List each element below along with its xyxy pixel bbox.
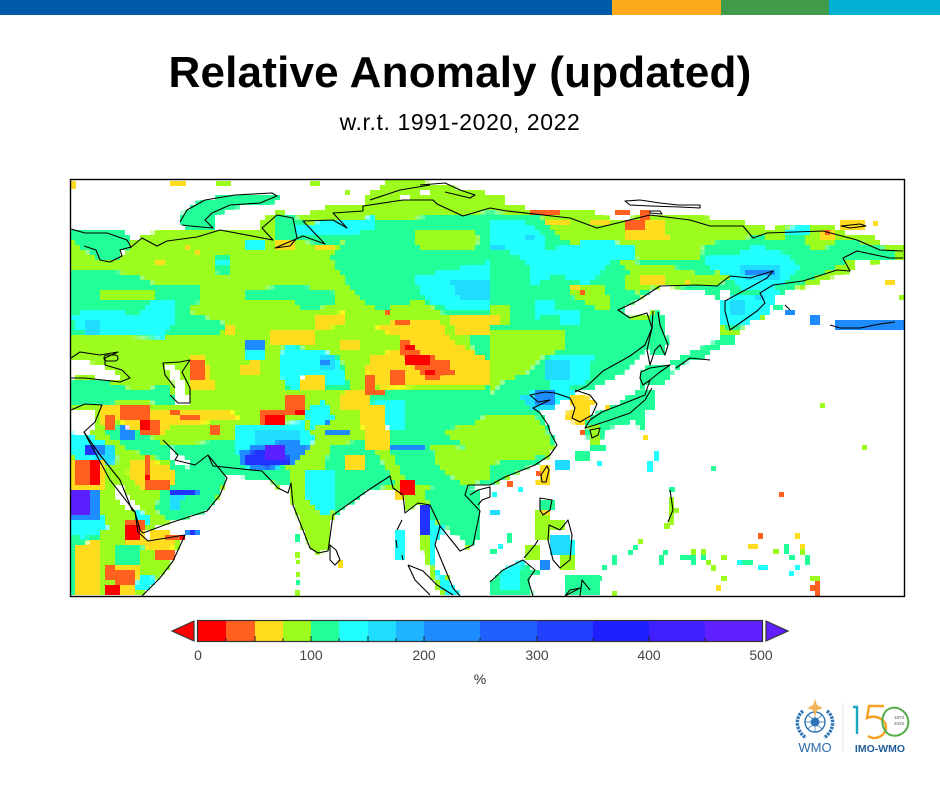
map: relative anomaly over Asia	[70, 178, 906, 598]
colour bar segments	[198, 620, 762, 641]
scale labels: 200	[412, 647, 436, 663]
white seas and gaps in the data field	[71, 191, 732, 580]
arrow: above range	[766, 621, 788, 641]
title: Relative Anomaly (updated)	[168, 48, 752, 97]
gridded data field	[71, 181, 904, 596]
logo: IMO-WMO 150 years: IMO-WMO	[855, 743, 905, 755]
map frame	[70, 180, 904, 596]
scale labels	[194, 647, 773, 687]
scattered island cells	[71, 181, 904, 596]
teal field	[71, 195, 895, 596]
logo: IMO-WMO 150 years: 2023	[894, 721, 905, 726]
top colour band	[0, 0, 940, 15]
arrow: below range	[172, 621, 194, 641]
ticks	[226, 636, 705, 641]
cyan field	[71, 216, 810, 596]
deep blue and violet field	[85, 445, 430, 537]
scale labels: %	[474, 671, 486, 687]
red field	[92, 346, 435, 596]
colour bar legend	[170, 620, 790, 687]
lime patches over teal	[71, 211, 835, 596]
coastlines	[71, 183, 903, 596]
blue field	[71, 268, 904, 571]
yellow field	[71, 218, 903, 596]
scale labels: 500	[749, 647, 773, 663]
logo: WMO emblem	[796, 699, 834, 755]
sky blue field	[87, 236, 778, 553]
logo: IMO-WMO 150 years	[842, 703, 910, 755]
logo: IMO-WMO 150 years: 1873	[894, 715, 905, 720]
scale labels: 400	[637, 647, 661, 663]
scale labels: 300	[525, 647, 549, 663]
subtitle: w.r.t. 1991-2020, 2022	[340, 109, 580, 135]
orange field	[75, 210, 830, 586]
scale labels: 100	[299, 647, 323, 663]
scale labels: 0	[194, 647, 202, 663]
logo: WMO emblem: WMO	[798, 740, 832, 755]
land data base field	[71, 181, 904, 596]
